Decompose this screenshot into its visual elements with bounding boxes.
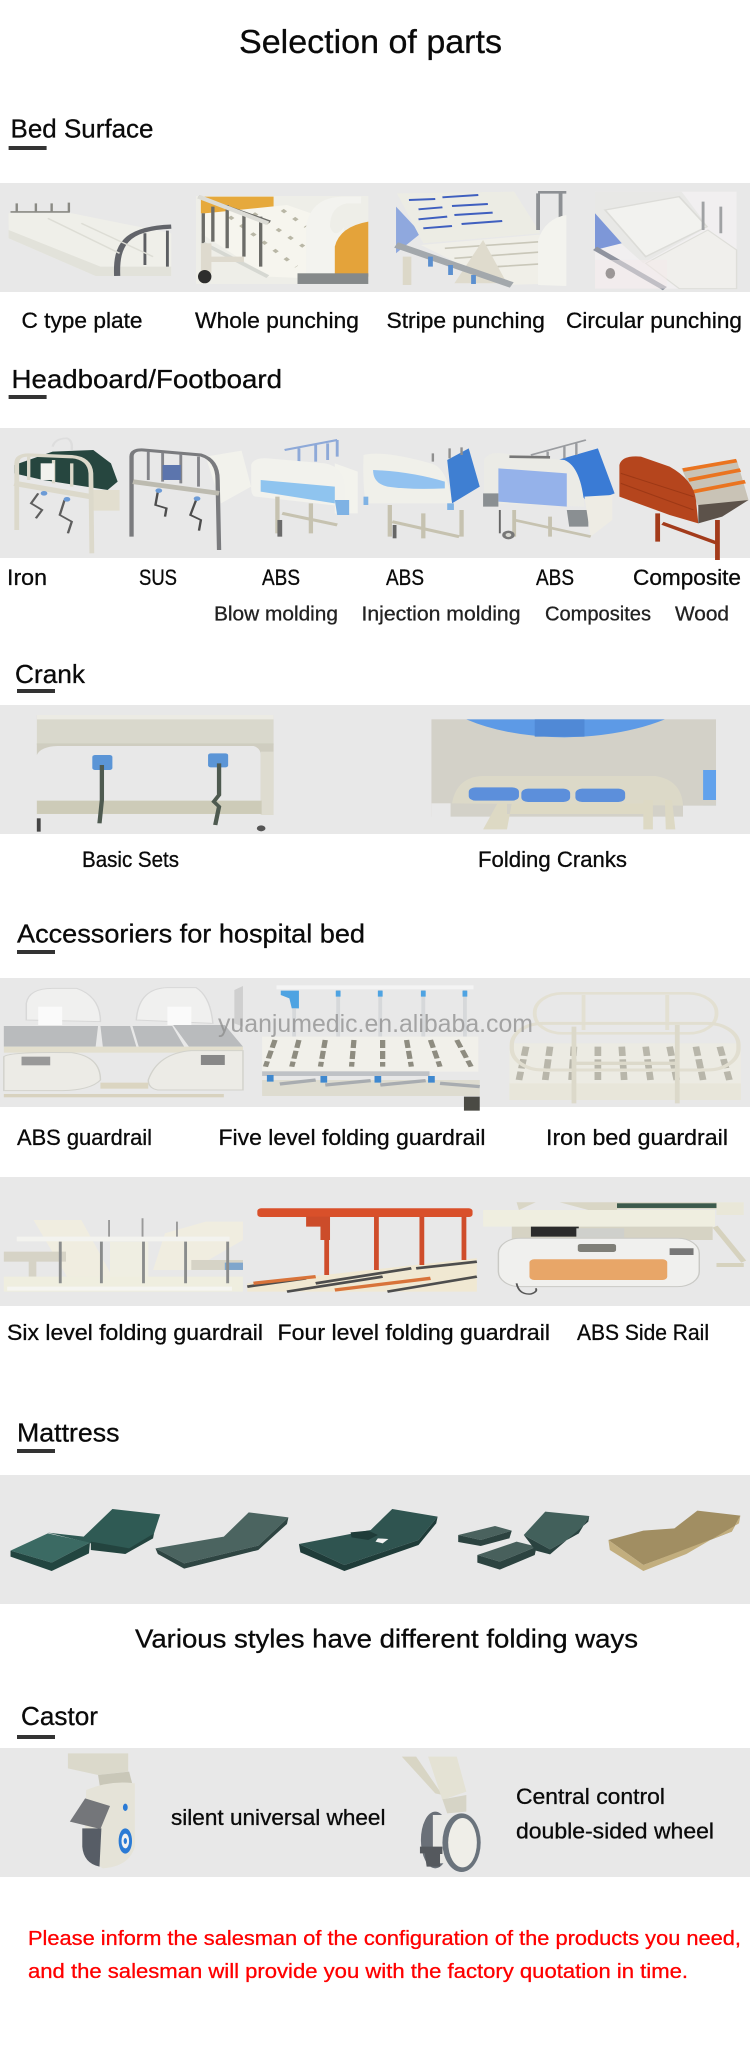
label: C type plate: C type plate (22, 308, 142, 333)
photo: C type plate (9, 203, 171, 276)
label: four level folding guardrail: Four level folding guardrail (278, 1320, 550, 1345)
icon: central control wheel (402, 1757, 481, 1872)
photo: composite wood headboard (619, 456, 749, 560)
panel: accessories (0, 918, 750, 1345)
watermark: yuanjumedic.en.alibaba.com (218, 1010, 533, 1038)
panel: bed surface (0, 114, 750, 333)
label: ABS two: ABS (386, 565, 424, 590)
band: headboard and footboard (0, 428, 750, 558)
photo: six level folding guardrail (4, 1218, 243, 1292)
heading: bed surface: Bed Surface (10, 114, 154, 144)
panel: headboard and footboard (0, 364, 750, 626)
photo: stripe punching (396, 192, 566, 286)
mattress one (11, 1509, 160, 1571)
label: blow molding: Blow molding (214, 604, 338, 626)
panel: mattress (0, 1418, 750, 1654)
panel: castor (0, 1701, 750, 1877)
photo: ABS composite headboard (483, 440, 615, 539)
label: stripe punching: Stripe punching (386, 308, 545, 333)
label: six level folding guardrail: Six level folding guardrail (7, 1320, 263, 1345)
band: guardrails row one (0, 978, 750, 1107)
label: circular punching: Circular punching (566, 308, 742, 333)
band: crank (0, 705, 750, 834)
heading: accessories: Accessoriers for hospital bed (17, 918, 365, 948)
notice: quotation message: and the salesman will provide you with the factory quotation in time. (28, 1960, 688, 1983)
photo: ABS injection molding headboard (363, 447, 480, 538)
photo: folding cranks (431, 719, 716, 831)
label: double-sided wheel: double-sided wheel (516, 1818, 714, 1844)
heading: mattress: Mattress (17, 1418, 120, 1448)
photo: whole punching (196, 196, 368, 284)
band: castor (0, 1748, 750, 1877)
photo: five level folding guardrail (262, 985, 480, 1111)
label: folding cranks: Folding Cranks (478, 847, 627, 872)
photo: ABS blow molding headboard (251, 440, 358, 537)
panel: crank (0, 659, 750, 872)
heading: crank: Crank (15, 659, 86, 689)
label: composite: Composite (633, 565, 741, 590)
photo: ABS guardrail (4, 986, 243, 1097)
label: five level folding guardrail: Five level folding guardrail (218, 1125, 486, 1150)
label: iron: Iron (7, 565, 47, 590)
band: mattress (0, 1475, 750, 1604)
caption: folding ways: Various styles have different folding ways (135, 1624, 638, 1654)
photo: basic crank set (37, 715, 274, 832)
photo: circular punching (595, 192, 737, 289)
photo: four level folding guardrail (247, 1208, 477, 1292)
photo: ABS side rail (483, 1202, 744, 1294)
photo: iron bed guardrail (509, 993, 741, 1103)
label: SUS: SUS (139, 565, 177, 590)
label: injection molding: Injection molding (362, 604, 520, 626)
label: ABS guardrail: ABS guardrail (17, 1125, 152, 1150)
label: ABS one: ABS (262, 565, 300, 590)
photo: stainless headboard (132, 450, 251, 550)
mattress two (155, 1512, 288, 1569)
mattress three (299, 1509, 438, 1571)
notice: quotation message: Please inform the salesman of the configuration of the products you need, (28, 1927, 741, 1950)
photo: iron headboard (14, 438, 120, 553)
label: iron bed guardrail: Iron bed guardrail (546, 1125, 728, 1150)
notice: quotation message (28, 1927, 741, 1983)
label: composites: Composites (545, 604, 651, 626)
icon: silent universal wheel (68, 1753, 135, 1868)
band: bed surface (0, 183, 750, 292)
label: wood: Wood (675, 604, 729, 626)
mattress five (608, 1511, 740, 1571)
label: ABS three: ABS (536, 565, 574, 590)
heading: headboard and footboard: Headboard/Footboard (12, 364, 282, 394)
mattress four (458, 1512, 589, 1570)
label: whole punching: Whole punching (195, 308, 359, 333)
title: Selection of parts (239, 23, 502, 60)
heading: castor: Castor (21, 1701, 98, 1731)
label: ABS side rail: ABS Side Rail (577, 1320, 709, 1345)
label: central control: Central control (516, 1784, 665, 1809)
band: guardrails row two (0, 1177, 750, 1306)
label: basic sets: Basic Sets (82, 847, 179, 872)
label: silent universal wheel: silent universal wheel (171, 1805, 386, 1830)
